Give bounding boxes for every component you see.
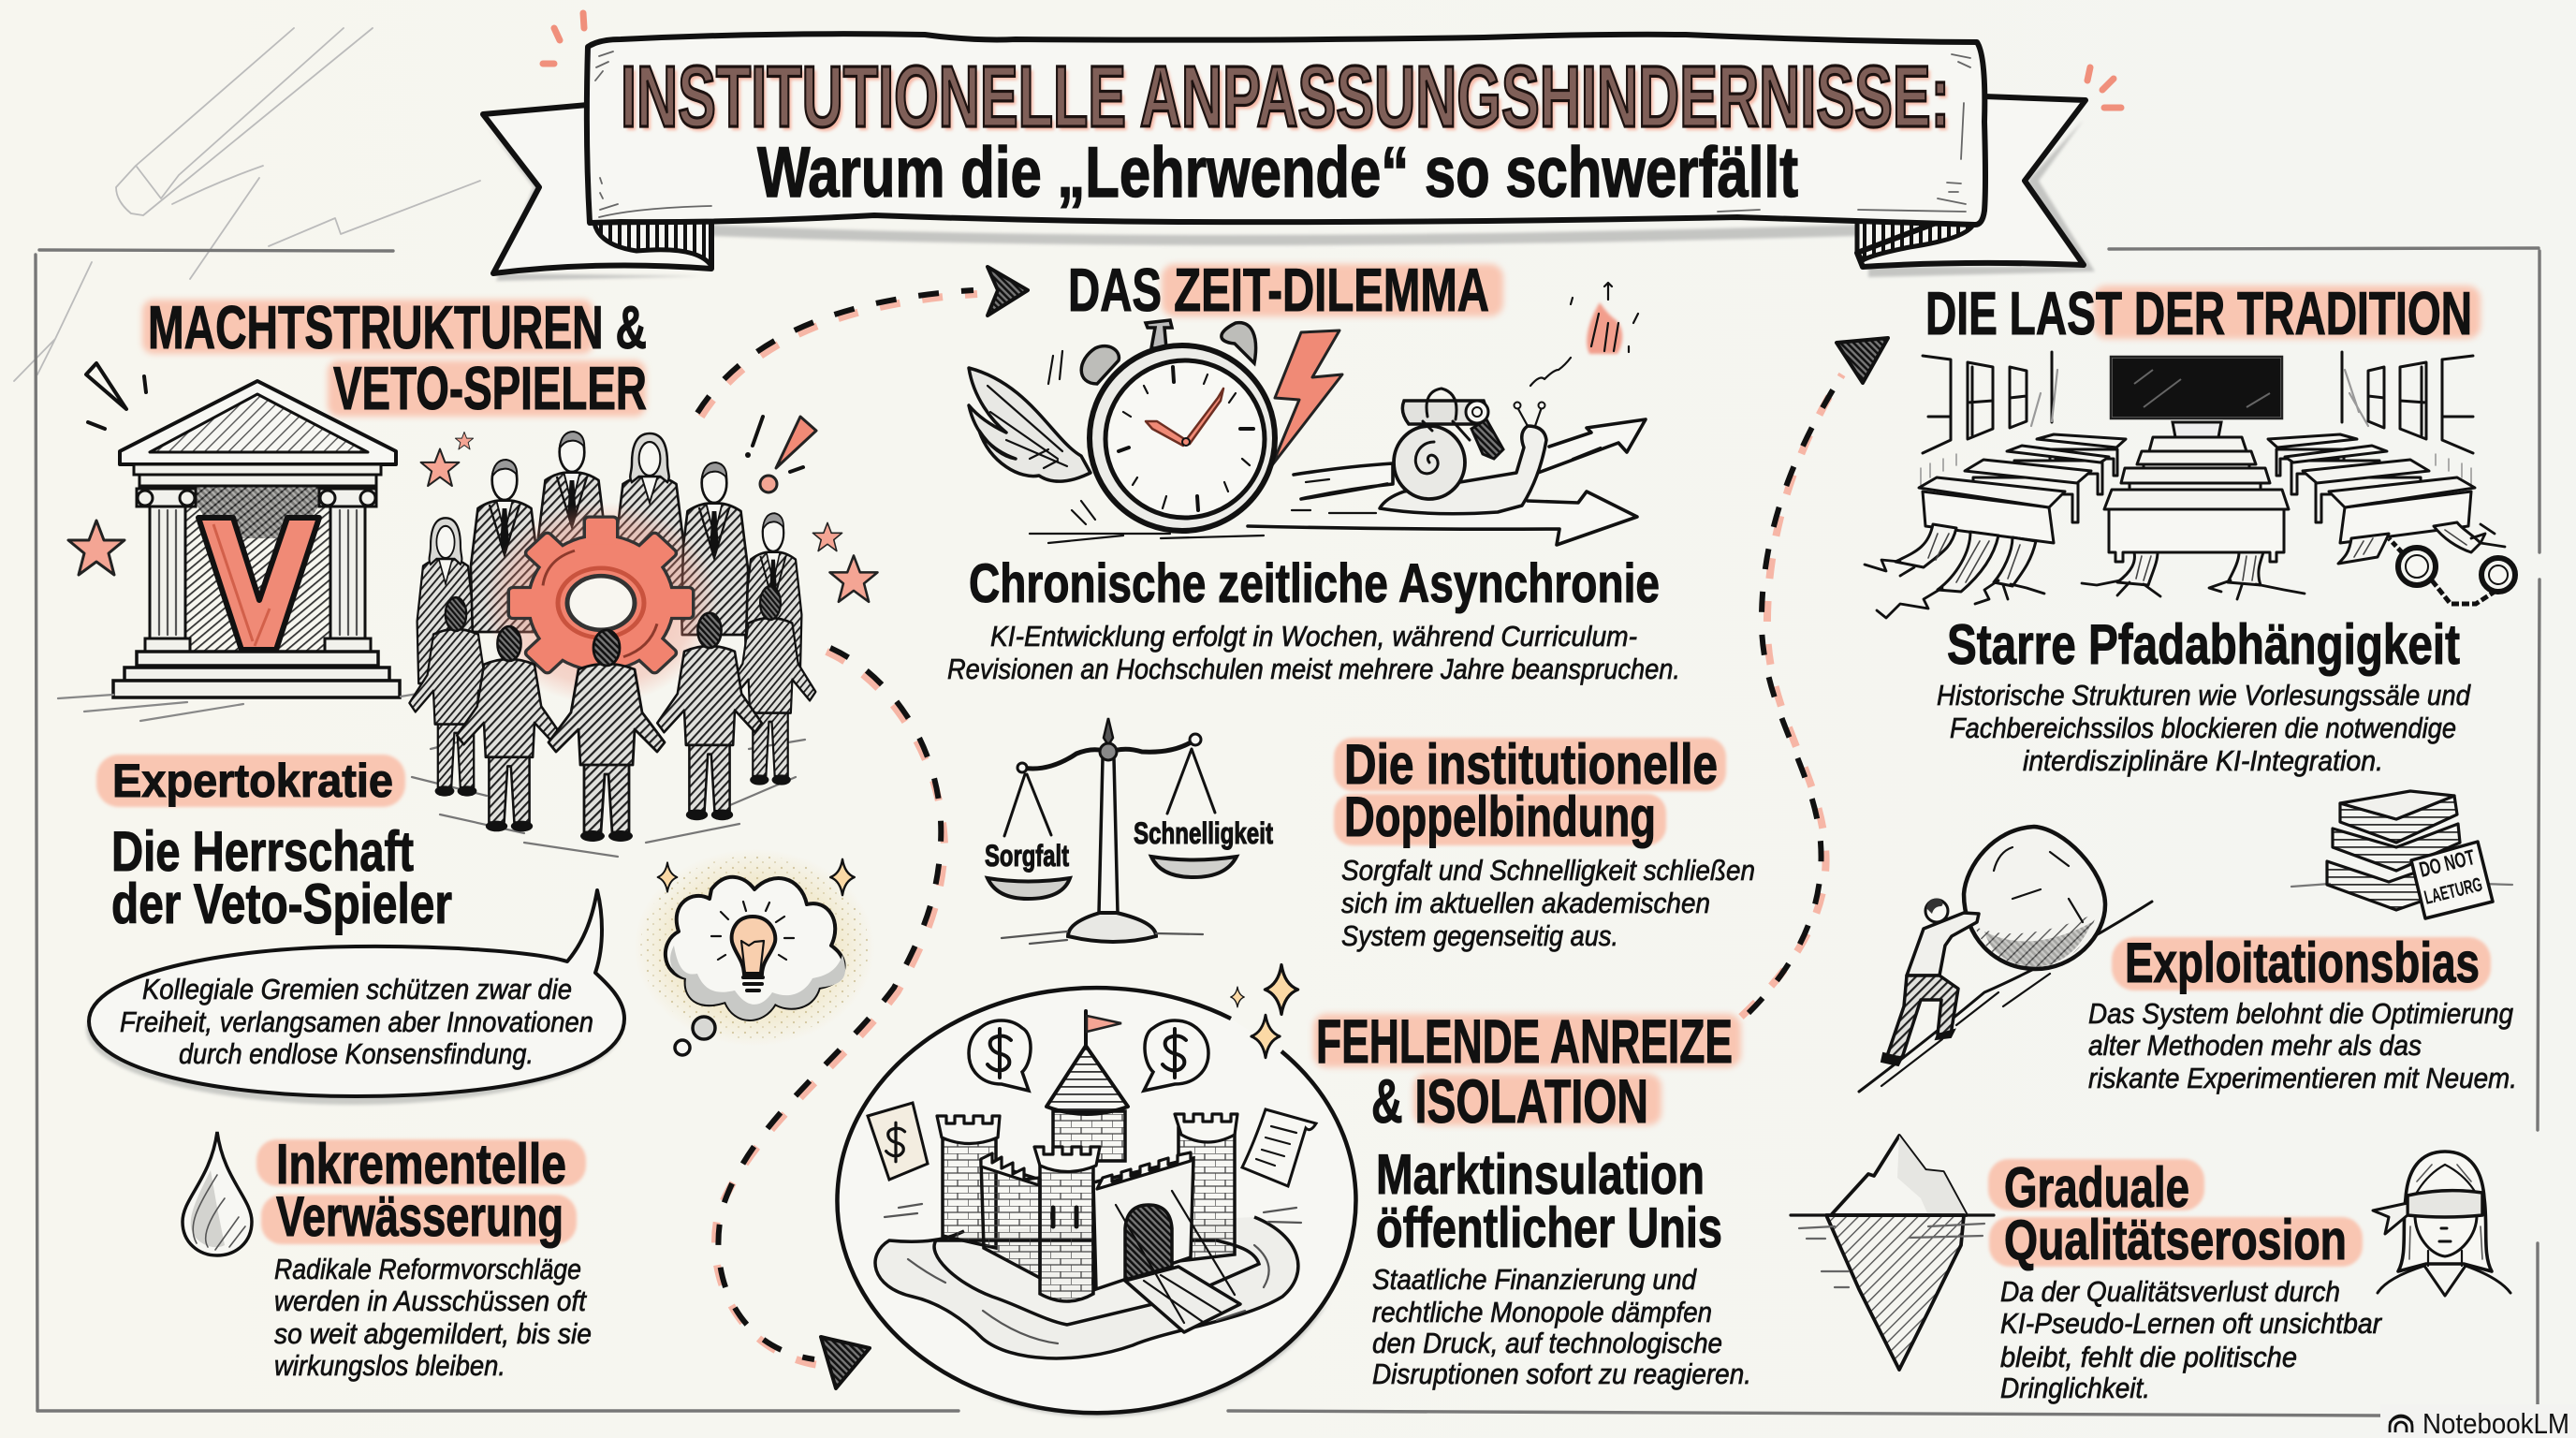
subheading: Starre Pfadabhängigkeit	[1947, 613, 2460, 676]
text block	[1988, 1156, 2383, 1404]
flow arrow three	[1741, 338, 1888, 1017]
icon: water drop	[183, 1132, 252, 1255]
description: rechtliche Monopole dämpfen	[1372, 1296, 1712, 1328]
block: Inkrementelle Verwässerung: werden in Ausschüssen oft	[274, 1284, 587, 1317]
money paper	[868, 1103, 928, 1180]
icon: gear	[510, 519, 692, 687]
text block: Qualitätserosion	[2004, 1209, 2347, 1271]
description: Revisionen an Hochschulen meist mehrere Jahre beanspruchen.	[947, 653, 1680, 685]
text block: KI-Pseudo-Lernen oft unsichtbar	[2000, 1307, 2383, 1340]
icon: stack of books with sign	[2291, 791, 2512, 918]
shackles and chain	[2389, 538, 2515, 604]
subheading: Chronische zeitliche Asynchronie	[969, 553, 1660, 614]
title line two: Warum die „Lehrwende“ so schwerfällt	[757, 133, 1798, 213]
text block: alter Methoden mehr als das	[2088, 1029, 2422, 1062]
panel: Machtstrukturen	[58, 293, 878, 1382]
description: Historische Strukturen wie Vorlesungssäle und	[1937, 679, 2472, 712]
description	[1372, 1263, 1751, 1390]
block: Inkrementelle Verwässerung: wirkungslos bleiben.	[274, 1349, 505, 1382]
text block: Die institutionelle	[1344, 733, 1718, 796]
block: Inkrementelle Verwässerung: so weit abgemildert, bis sie	[274, 1317, 592, 1350]
left ribbon tail	[483, 105, 711, 273]
icon: Sisyphus with boulder	[1859, 827, 2152, 1092]
icon: temple with V	[58, 381, 423, 721]
text block	[1334, 733, 1755, 952]
walls and windows	[1923, 352, 2473, 453]
subheading: Die Herrschaft der Veto-Spieler	[111, 820, 452, 935]
panel: Die Last der Tradition	[1865, 279, 2515, 777]
subheading: öffentlicher Unis	[1376, 1196, 1722, 1259]
subheading: Die Herrschaft der Veto-Spieler: Die Herrschaft	[111, 820, 414, 883]
text block: Da der Qualitätsverlust durch	[2000, 1275, 2340, 1308]
icon: stack of books with sign: LAETURG	[2422, 873, 2484, 909]
outer frame	[36, 248, 2539, 1416]
heading: MACHTSTRUKTUREN &	[148, 293, 647, 361]
icon: scales	[988, 718, 1237, 944]
text block: Das System belohnt die Optimierung	[2088, 997, 2513, 1030]
description: Disruptionen sofort zu reagieren.	[1372, 1357, 1751, 1390]
subheading: Expertokratie: Expertokratie	[112, 755, 393, 807]
block: Inkrementelle Verwässerung	[256, 1133, 592, 1382]
scroll	[1242, 1109, 1316, 1186]
dollar bubbles	[969, 1020, 1031, 1091]
block: Inkrementelle Verwässerung: Radikale Reformvorschläge	[274, 1253, 581, 1285]
committee circle around gear	[409, 432, 815, 857]
heading: FEHLENDE ANREIZE	[1316, 1006, 1733, 1076]
text block: riskante Experimentieren mit Neuem.	[2088, 1062, 2517, 1094]
subheading	[1376, 1143, 1722, 1259]
icon: winged clock	[969, 320, 1342, 543]
banner shadow	[711, 225, 1857, 245]
text block: sich im aktuellen akademischen	[1341, 887, 1710, 919]
roots	[1895, 522, 2481, 592]
text block: Dringlichkeit.	[2000, 1372, 2150, 1404]
block: Inkrementelle Verwässerung: Inkrementelle	[276, 1133, 566, 1196]
description: Staatliche Finanzierung und	[1372, 1263, 1698, 1296]
panel: Fehlende Anreize	[837, 965, 1751, 1417]
banner body	[587, 34, 1985, 225]
heading: & ISOLATION	[1371, 1066, 1648, 1136]
description: Fachbereichssilos blockieren die notwendige	[1950, 712, 2456, 744]
flow arrow one	[697, 267, 1028, 417]
panel: Graduale Qualitätserosion	[1791, 1136, 2510, 1404]
desks centre	[2149, 437, 2247, 451]
panel: Doppelbindung	[985, 718, 1755, 952]
icon: castle in circle	[837, 965, 1355, 1417]
subheading: Die Herrschaft der Veto-Spieler: der Veto-Spieler	[111, 873, 452, 935]
icon: iceberg	[1791, 1136, 1994, 1370]
right ribbon tail	[1857, 96, 2086, 267]
subheading: Marktinsulation	[1376, 1143, 1705, 1206]
banner fold strokes	[595, 51, 1970, 217]
heading	[1313, 1006, 1741, 1136]
description	[947, 620, 1680, 685]
text block: Graduale	[2004, 1156, 2189, 1219]
text block	[2088, 932, 2517, 1094]
label: Schnelligkeit: Schnelligkeit	[1134, 816, 1273, 850]
description: KI-Entwicklung erfolgt in Wochen, während Curriculum-	[990, 620, 1637, 653]
heading: DAS ZEIT-DILEMMA	[1068, 256, 1489, 324]
speech bubble: durch endlose Konsensfindung.	[179, 1037, 534, 1070]
desks right	[2276, 449, 2344, 476]
text block: bleibt, fehlt die politische	[2000, 1341, 2297, 1373]
text block: Exploitationsbias	[2125, 932, 2480, 994]
blackboard	[2114, 360, 2279, 416]
icon: stack of books with sign: DO NOT	[2417, 844, 2477, 882]
decorative stars and marks	[68, 363, 878, 602]
heading	[142, 293, 647, 422]
panel: Exploitationsbias	[1859, 791, 2517, 1094]
title banner	[483, 13, 2121, 281]
arrows behind snail	[1294, 419, 1646, 499]
label: Sorgfalt: Sorgfalt	[985, 839, 1069, 873]
icon: thought cloud with light bulb	[635, 849, 874, 1055]
faint pencil sketch	[14, 28, 480, 381]
text block: Doppelbindung	[1344, 785, 1656, 848]
speech bubble	[86, 890, 624, 1105]
speech bubble: Freiheit, verlangsamen aber Innovationen	[120, 1005, 593, 1038]
description: interdisziplinäre KI-Integration.	[2023, 744, 2383, 777]
icon: classroom with rooted desks	[1865, 352, 2515, 618]
flow arrow two	[715, 648, 944, 1388]
description: den Druck, auf technologische	[1372, 1327, 1722, 1359]
icon: flame and squiggle	[1530, 283, 1638, 386]
speech bubble: Kollegiale Gremien schützen zwar die	[142, 973, 572, 1005]
text block: Sorgfalt und Schnelligkeit schließen	[1341, 854, 1755, 887]
sparks	[543, 13, 2121, 108]
text block: System gegenseitig aus.	[1341, 919, 1618, 952]
heading: VETO-SPIELER	[333, 354, 647, 422]
icon: snail with backpack	[1248, 389, 1646, 545]
icon: blindfolded woman	[2373, 1152, 2510, 1296]
ribbon folds	[594, 222, 711, 266]
description	[1937, 679, 2472, 777]
block: Inkrementelle Verwässerung: Verwässerung	[276, 1185, 564, 1248]
panel: Das Zeit-Dilemma	[947, 256, 1680, 685]
desks left	[2050, 449, 2117, 476]
